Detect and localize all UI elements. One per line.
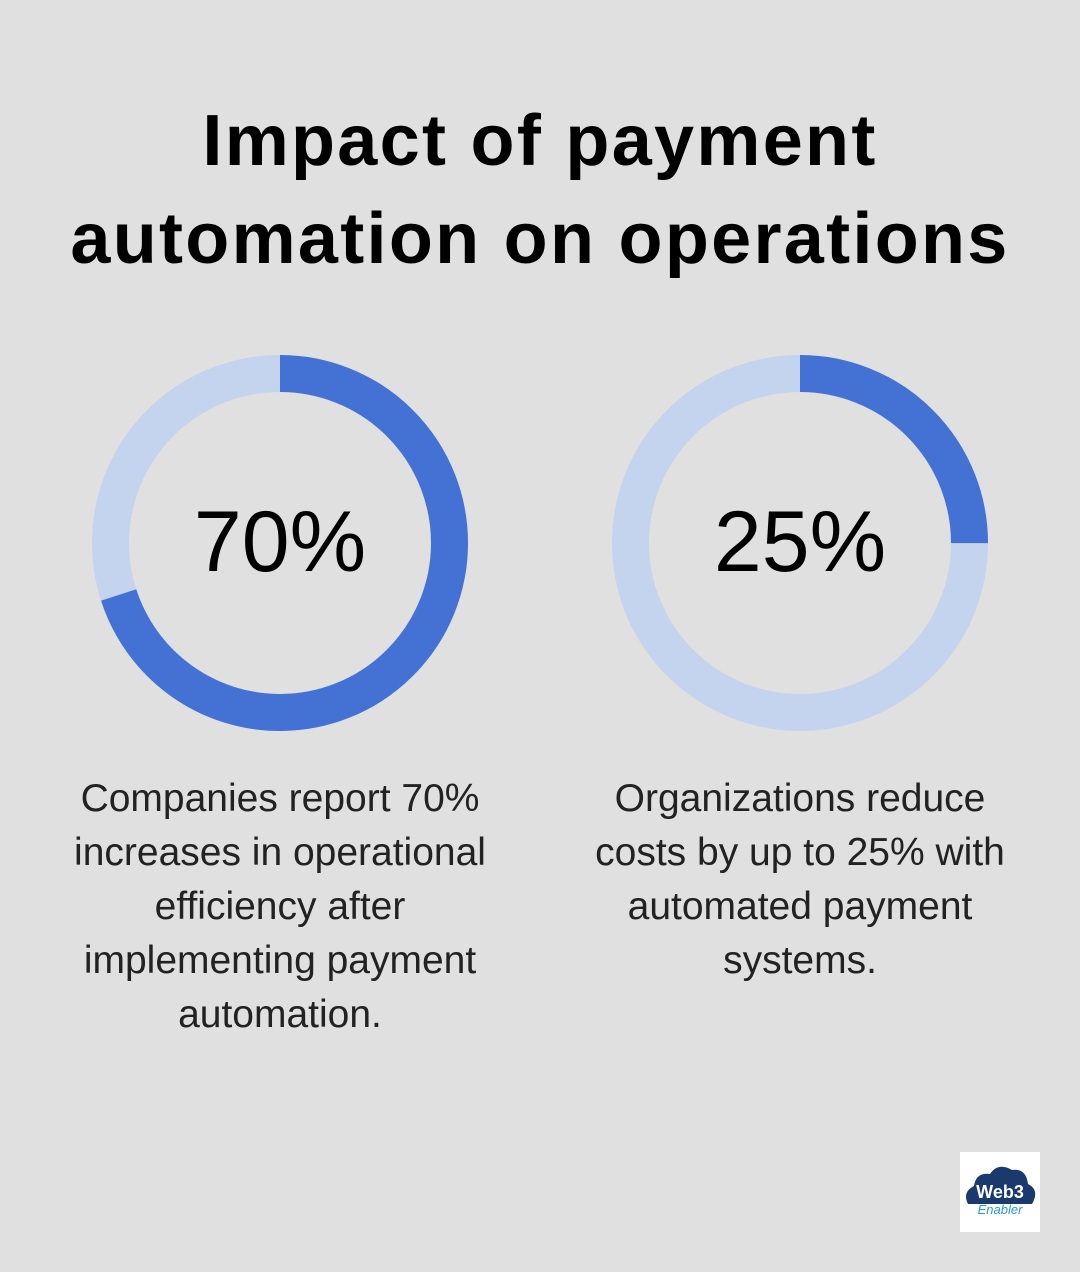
stat: 25%: 25% (714, 494, 886, 590)
caption: 70%: Companies report 70% increases in operational efficiency after implementing payment automation. (74, 777, 486, 1036)
donut chart: 25% (612, 355, 988, 731)
donut chart: 70% (92, 355, 468, 731)
stat: 70%: 70% (194, 494, 366, 590)
title: Impact of payment (202, 101, 878, 181)
logo: Web3 (976, 1182, 1024, 1202)
title (70, 101, 1010, 279)
logo (960, 1152, 1040, 1232)
logo: Enabler (978, 1202, 1023, 1217)
title: automation on operations (70, 199, 1010, 279)
caption: 25%: Organizations reduce costs by up to 25% with automated payment systems. (595, 777, 1005, 982)
